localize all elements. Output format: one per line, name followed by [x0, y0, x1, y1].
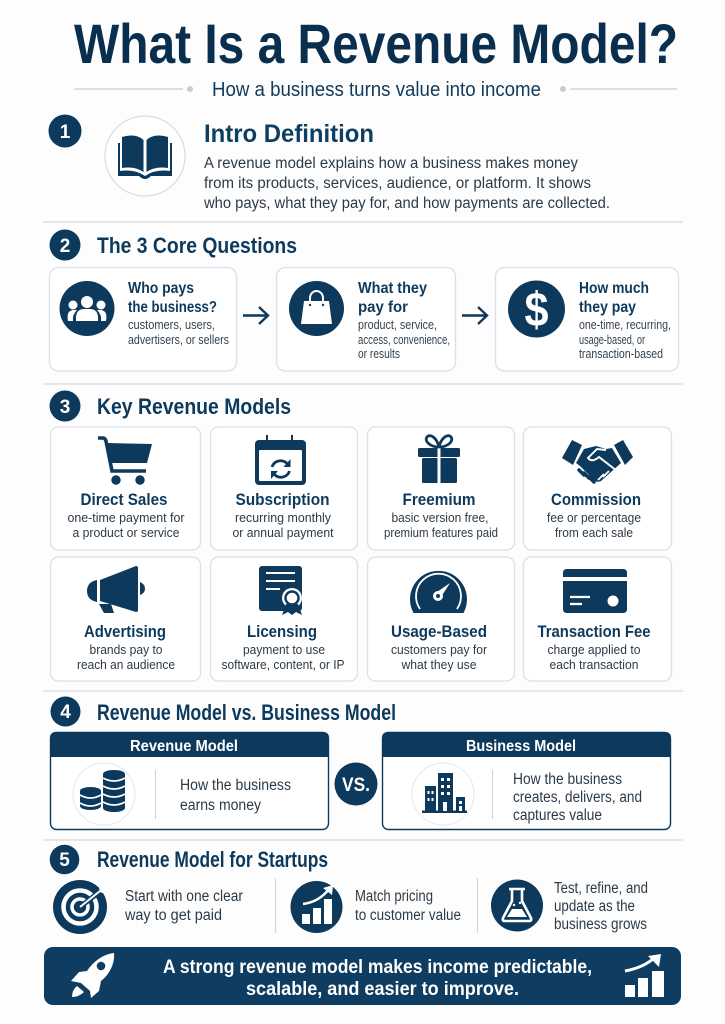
arrow [243, 307, 268, 324]
icon: dollar [508, 280, 565, 338]
tip text: update as the [554, 898, 635, 915]
question text: advertisers, or sellers [128, 332, 229, 347]
description: one-time payment for [68, 510, 185, 525]
description: brands pay to [90, 642, 162, 657]
description [232, 510, 334, 540]
subtitle [74, 79, 677, 101]
description: customers pay for [391, 642, 488, 657]
panel: licensing [210, 557, 358, 681]
icon: buildings [412, 763, 474, 825]
tip text: business grows [554, 916, 647, 933]
vs badge: VS. [342, 775, 370, 796]
tip: one clear way [53, 880, 243, 934]
icon: certificate [259, 566, 302, 615]
number badge 4: 4 [60, 702, 71, 723]
description [222, 642, 344, 672]
tip text [124, 888, 243, 924]
section 3: key revenue models [50, 390, 672, 681]
description: or annual payment [232, 525, 334, 540]
description: charge applied to [548, 642, 640, 657]
question text [358, 280, 450, 361]
label: transaction fee: Transaction Fee [538, 622, 650, 641]
icon: open book [105, 116, 185, 196]
question text: transaction-based [579, 346, 663, 361]
description: recurring monthly [235, 510, 331, 525]
label: advertising: Advertising [84, 622, 166, 641]
section 5: revenue model for startups [50, 845, 648, 934]
label: commission: Commission [551, 490, 641, 509]
heading: the 3 core questions: The 3 Core Questions [97, 233, 297, 258]
panel: advertising [50, 557, 200, 681]
banner [44, 947, 681, 1005]
label: usage-based: Usage-Based [391, 622, 487, 641]
description: creates, delivers, and [513, 789, 642, 806]
heading: revenue model vs business model: Revenue Model vs. Business Model [97, 700, 396, 725]
panel: revenue model: Revenue Model [130, 738, 238, 755]
icon: calendar refresh [255, 435, 306, 485]
description: premium features paid [384, 525, 498, 540]
subtitle: How a business turns value into income [212, 79, 541, 101]
icon: dollar: $ [524, 284, 549, 337]
tip text [554, 880, 648, 933]
number badge 5: 5 [59, 850, 70, 871]
icon: rocket [71, 953, 114, 998]
description [513, 771, 642, 824]
question text: usage-based, or [579, 332, 645, 347]
label: subscription: Subscription [236, 490, 330, 509]
tip text: Match pricing [355, 888, 433, 905]
description: earns money [180, 797, 261, 814]
description: payment to use [243, 642, 325, 657]
panel: subscription [210, 427, 358, 550]
panel: who pays [50, 268, 236, 371]
tip text: to customer value [355, 907, 461, 924]
description: each transaction [550, 657, 638, 672]
icon: shopping bag [289, 281, 344, 336]
number badge 2: 2 [60, 236, 70, 257]
panel: transaction fee [524, 557, 672, 681]
icon: growth chart [290, 881, 342, 933]
question text: access, convenience, [358, 332, 450, 347]
number badge 1 [48, 114, 82, 148]
description: what they use [401, 657, 476, 672]
description [548, 642, 640, 672]
question text [128, 280, 229, 347]
label: freemium: Freemium [402, 490, 476, 509]
tip: test and refine [491, 880, 648, 933]
banner message: scalable, and easier to improve. [246, 979, 519, 1000]
question text: the business? [128, 299, 217, 316]
question text: pay for [358, 299, 408, 316]
definition text [203, 155, 610, 212]
description: How the business [513, 771, 622, 788]
number badge 1: 1 [60, 122, 71, 143]
icon: people [60, 281, 114, 336]
question text: How much [579, 280, 649, 297]
description [180, 777, 291, 814]
panel: direct sales [50, 427, 200, 550]
heading: intro definition: Intro Definition [204, 120, 374, 148]
icon: gift box [418, 436, 460, 483]
description: fee or percentage [547, 510, 641, 525]
number badge 3: 3 [60, 397, 70, 418]
number badge 5 [50, 845, 79, 874]
section 1: intro definition [48, 114, 610, 212]
panel: freemium [368, 427, 514, 550]
number badge 4 [50, 696, 80, 726]
icon: coin stacks [73, 763, 135, 825]
number badge 3 [50, 390, 80, 422]
arrow [462, 307, 487, 324]
question text: one-time, recurring, [579, 317, 671, 332]
question text: What they [358, 280, 427, 297]
panel: revenue model [50, 732, 329, 830]
panel: how much they pay [496, 268, 678, 371]
description: captures value [513, 807, 602, 824]
label: direct sales: Direct Sales [80, 490, 168, 509]
question text: product, service, [358, 317, 437, 332]
question text: or results [358, 346, 400, 361]
number badge 2 [50, 230, 80, 260]
heading: revenue model for startups: Revenue Model for Startups [97, 847, 328, 872]
panel: commission [524, 427, 672, 550]
panel: usage-based [368, 557, 514, 681]
description: from each sale [555, 525, 633, 540]
description: a product or service [72, 525, 180, 540]
question text: they pay [579, 299, 636, 316]
description: software, content, or IP [222, 657, 344, 672]
definition text: A revenue model explains how a business makes money [204, 155, 578, 172]
banner message: A strong revenue model makes income predictable, [163, 957, 592, 978]
section 4: revenue model vs business model [50, 696, 671, 830]
description: basic version free, [392, 510, 488, 525]
question text: Who pays [128, 280, 194, 297]
heading: key revenue models: Key Revenue Models [97, 394, 291, 419]
question text: customers, users, [128, 317, 215, 332]
tip text: way to get paid [124, 907, 222, 924]
icon: credit card [563, 569, 627, 613]
icon: flask [491, 880, 543, 932]
icon: speedometer [410, 571, 467, 613]
tip text: Test, refine, and [554, 880, 648, 897]
tip: match pricing [290, 881, 461, 933]
panel: business model: Business Model [466, 738, 576, 755]
description [547, 510, 641, 540]
icon: growth bars [625, 954, 664, 997]
label: licensing: Licensing [247, 622, 317, 641]
panel: what they pay for [276, 268, 456, 371]
vs badge [334, 762, 378, 806]
icon: handshake [562, 440, 633, 482]
definition text: from its products, services, audience, or platform. It shows [204, 175, 591, 192]
tip text: Start with one clear [125, 888, 243, 905]
tip text [355, 888, 461, 924]
section 2: the 3 core questions [50, 230, 678, 371]
icon: megaphone [87, 566, 145, 613]
description [68, 510, 185, 540]
icon: shopping cart [98, 438, 152, 485]
description [77, 642, 175, 672]
description [384, 510, 498, 540]
description [391, 642, 488, 672]
question text [579, 280, 671, 361]
panel: business model [382, 732, 671, 830]
description: reach an audience [77, 657, 175, 672]
icon: target [53, 880, 110, 934]
banner message [163, 957, 592, 1000]
definition text: who pays, what they pay for, and how payments are collected. [203, 195, 610, 212]
description: How the business [180, 777, 291, 794]
